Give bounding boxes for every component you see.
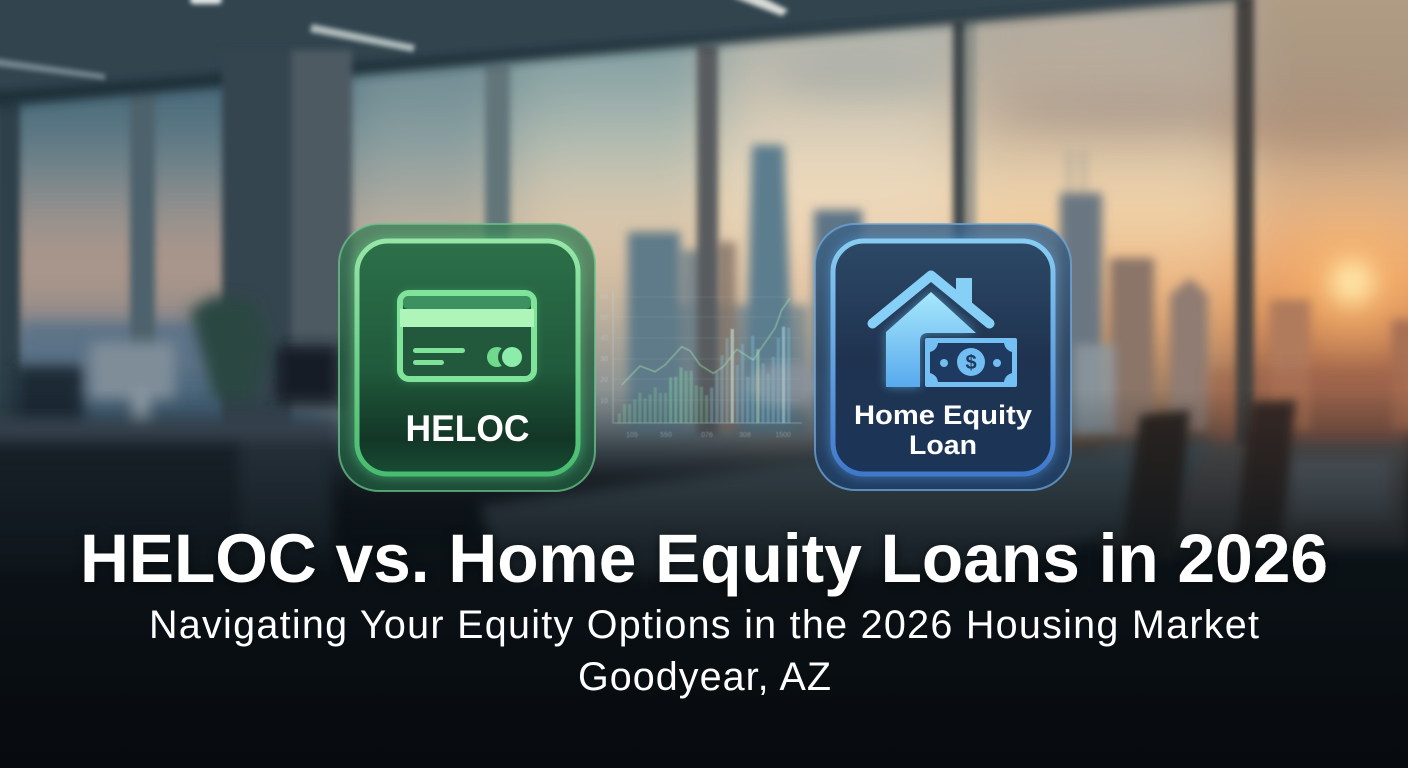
- lower city haze: [20, 322, 1408, 550]
- chart x axis labels: 308: [739, 432, 751, 439]
- label: Home Equity Loan: Home Equity: [854, 400, 1032, 430]
- conference table: [480, 445, 1210, 580]
- card inner frame: [833, 241, 1053, 474]
- office furniture, left: [0, 295, 340, 570]
- label: Home Equity Loan: Loan: [909, 430, 977, 460]
- label: HELOC: HELOC: [406, 408, 530, 449]
- floor darkening gradient: [0, 390, 1408, 768]
- chart grid: [613, 297, 800, 400]
- house body: [886, 292, 976, 387]
- chart bars: [618, 367, 708, 423]
- ceiling lights: [0, 0, 788, 80]
- structural pillar: [222, 50, 352, 430]
- panel: Home Equity Loan card: [815, 224, 1071, 490]
- holographic chart: [600, 290, 802, 439]
- chart axes: [613, 290, 802, 423]
- icon: house with cash: [872, 276, 1017, 387]
- chart x axis labels: 076: [701, 432, 713, 439]
- label: Home Equity Loan: [854, 400, 1032, 460]
- icon: house with cash: $: [965, 352, 977, 374]
- sky through windows: [0, 0, 1408, 460]
- window mullions: [0, 0, 1254, 445]
- chart x axis labels: 550: [660, 432, 672, 439]
- meeting chairs: [1120, 400, 1296, 560]
- chart trend line: [622, 298, 790, 385]
- chart y axis labels: 30: [600, 356, 608, 363]
- chart y axis labels: 20: [600, 377, 608, 384]
- icon: credit card: [400, 293, 534, 380]
- house roof: [956, 278, 972, 312]
- card inner glow frame: [833, 241, 1053, 474]
- card glass outer frame: [815, 224, 1071, 490]
- city skyline: [628, 145, 1408, 438]
- chart y axis labels: 60: [600, 294, 608, 301]
- card inner glow frame: [357, 241, 578, 474]
- subtitle: Navigating Your Equity Options in the 2026 Housing Market: [149, 603, 1259, 647]
- clouds: [770, 26, 1408, 147]
- panel: HELOC card: [339, 224, 595, 491]
- title: HELOC vs. Home Equity Loans in 2026: [80, 520, 1328, 597]
- card glass outer frame: [339, 224, 595, 491]
- chart x axis labels: 105: [626, 432, 638, 439]
- cash banknote: [925, 338, 1017, 387]
- chart x axis labels: [626, 432, 791, 439]
- chart y axis labels: [600, 294, 608, 405]
- ceiling: [0, 0, 1260, 108]
- chart y axis labels: 40: [600, 335, 608, 342]
- location: Goodyear, AZ: [578, 655, 831, 699]
- card inner frame: [357, 241, 578, 474]
- chart x axis labels: 1500: [775, 432, 791, 439]
- sun glow: [1297, 230, 1407, 340]
- chart y axis labels: 50: [600, 315, 608, 322]
- chart y axis labels: 10: [600, 398, 608, 405]
